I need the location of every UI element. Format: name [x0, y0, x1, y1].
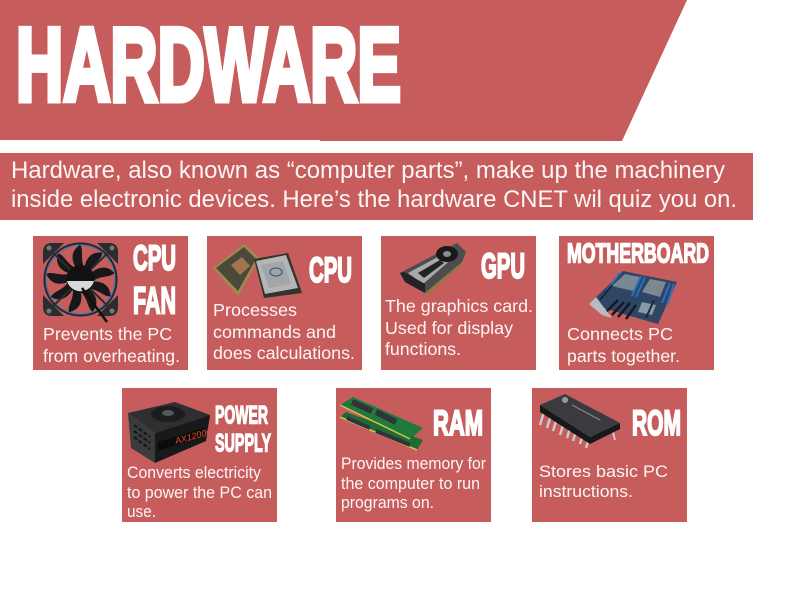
title: HARDWARE: [16, 8, 401, 124]
description: Motherboard: [567, 324, 680, 366]
panel: RAM: [336, 388, 491, 522]
description: GPU: The graphics card.: [385, 296, 533, 316]
intro text panel: Hardware, also known as “computer parts”, make up the machinery: [11, 157, 726, 184]
description: CPU: Processes: [213, 300, 297, 320]
intro text panel: inside electronic devices. Here’s the hardware CNET wil quiz you on.: [11, 186, 737, 213]
heading: POWER SUPPLY: [215, 402, 271, 458]
description: ROM: instructions.: [539, 482, 633, 501]
description: Power supply: use.: [127, 502, 156, 521]
intro text panel: [0, 153, 753, 220]
description: RAM: programs on.: [341, 493, 434, 512]
description: ROM: Stores basic PC: [539, 462, 668, 481]
icon: motherboard: [589, 271, 677, 324]
description: CPU fan: Prevents the PC: [43, 324, 172, 344]
icon: power supply: [128, 402, 210, 463]
description: CPU fan: [43, 324, 180, 366]
description: RAM: the computer to run: [341, 474, 480, 493]
description: GPU: Used for display: [385, 318, 513, 338]
description: CPU: [213, 300, 355, 363]
description: CPU fan: from overheating.: [43, 346, 180, 366]
panel: CPU fan: [33, 236, 188, 370]
heading: RAM: RAM: [433, 404, 483, 443]
description: Motherboard: Connects PC: [567, 324, 673, 344]
heading: CPU FAN: [133, 239, 176, 322]
description: Power supply: Converts electricity: [127, 463, 261, 482]
heading: MOTHERBOARD: MOTHERBOARD: [567, 238, 709, 268]
description: RAM: Provides memory for: [341, 454, 486, 473]
description: CPU: does calculations.: [213, 343, 355, 363]
heading: CPU FAN: FAN: [133, 280, 176, 322]
icon: CPU chips: [213, 244, 302, 298]
description: GPU: [385, 296, 533, 359]
description: RAM: [341, 454, 486, 512]
description: Power supply: to power the PC can: [127, 483, 272, 502]
header banner: [0, 0, 687, 141]
panel: ROM: [532, 388, 687, 522]
heading: POWER SUPPLY: POWER: [215, 402, 268, 430]
description: Power supply: [127, 463, 272, 521]
description: Motherboard: parts together.: [567, 346, 680, 366]
icon: CPU fan: [43, 243, 118, 322]
heading: CPU: CPU: [309, 251, 352, 290]
icon: power supply: AX1200i: [173, 427, 210, 446]
description: ROM: [539, 462, 668, 501]
description: CPU: commands and: [213, 322, 336, 342]
panel: Power supply: [122, 388, 277, 522]
panel: CPU: [207, 236, 362, 370]
icon: RAM sticks: [340, 397, 423, 450]
icon: graphics card: [400, 243, 466, 296]
panel: GPU: [381, 236, 536, 370]
heading: ROM: ROM: [632, 404, 681, 443]
icon: ROM chip: [540, 394, 620, 448]
heading: CPU FAN: CPU: [133, 239, 176, 278]
panel: Motherboard: [559, 236, 714, 370]
heading: GPU: GPU: [481, 247, 525, 286]
heading: POWER SUPPLY: SUPPLY: [215, 430, 271, 458]
description: GPU: functions.: [385, 339, 461, 359]
